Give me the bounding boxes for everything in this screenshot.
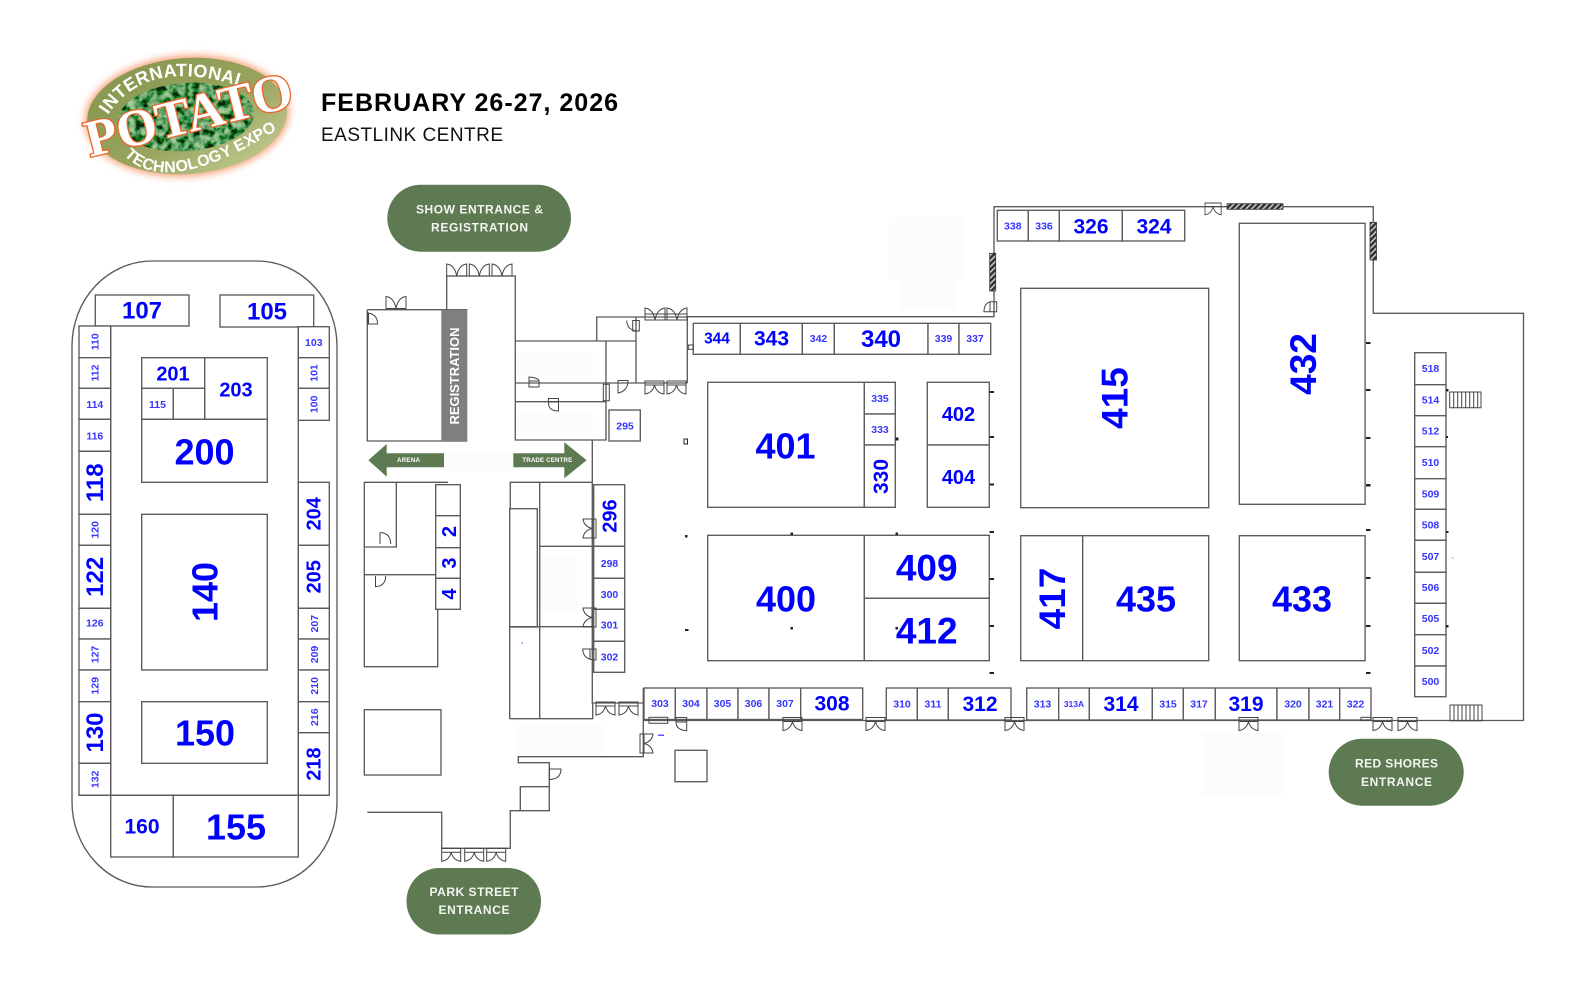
title: date: FEBRUARY 26-27, 2026 bbox=[321, 89, 618, 117]
booth 122: 122 bbox=[82, 557, 109, 597]
booth 409 bbox=[864, 535, 989, 598]
booth 314: 314 bbox=[1103, 693, 1139, 716]
booth 409: 409 bbox=[896, 548, 958, 588]
subtitle: venue: EASTLINK CENTRE bbox=[321, 125, 503, 146]
building walls bbox=[367, 207, 1523, 848]
booth 295 bbox=[609, 410, 640, 441]
booth 100: 100 bbox=[308, 395, 320, 413]
booth 304 bbox=[675, 688, 707, 720]
panel: arena booths bbox=[79, 295, 329, 857]
booth 304: 304 bbox=[682, 698, 700, 710]
booth 300: 300 bbox=[601, 589, 618, 601]
logo: International Potato Technology Expo: INTERNATIONAL bbox=[98, 64, 241, 114]
single doors bbox=[368, 302, 997, 780]
booth 301: 301 bbox=[601, 620, 618, 632]
booth 302: 302 bbox=[601, 652, 618, 664]
booth 330: 330 bbox=[870, 459, 893, 494]
booth 112: 112 bbox=[90, 364, 102, 381]
booth 512: 512 bbox=[1422, 426, 1439, 438]
booth 140 bbox=[142, 514, 267, 670]
booth 129: 129 bbox=[90, 677, 102, 695]
door frames and small fixtures bbox=[649, 345, 1371, 723]
pill: park street entrance: ENTRANCE bbox=[438, 903, 510, 917]
booth 115 bbox=[142, 388, 173, 419]
arena hall outline bbox=[72, 261, 337, 887]
registration room bar: REGISTRATION bbox=[447, 328, 462, 424]
booth 432 bbox=[1239, 223, 1365, 504]
left rooms bbox=[364, 482, 448, 667]
panel: trade centre booths bbox=[436, 410, 640, 672]
booth 118: 118 bbox=[82, 463, 109, 502]
booth 320: 320 bbox=[1284, 698, 1302, 710]
booth 210: 210 bbox=[309, 677, 321, 695]
booth 307 bbox=[769, 688, 801, 720]
booth 201 bbox=[142, 358, 205, 388]
booth 201: 201 bbox=[156, 364, 190, 386]
booth 339: 339 bbox=[935, 333, 952, 345]
booth 116 bbox=[79, 419, 111, 451]
booth 103: 103 bbox=[305, 337, 323, 349]
booth 298: 298 bbox=[601, 558, 618, 570]
booth 209: 209 bbox=[309, 646, 321, 663]
booth 306 bbox=[738, 688, 769, 720]
booth 308 bbox=[801, 688, 863, 720]
booth 303 bbox=[644, 688, 675, 720]
booth 306: 306 bbox=[745, 698, 762, 710]
booth 400 bbox=[708, 535, 864, 661]
booth 317 bbox=[1183, 688, 1215, 720]
booth 313 bbox=[1027, 688, 1059, 720]
stairs upper bbox=[1450, 392, 1481, 408]
pill: red shores entrance: ENTRANCE bbox=[1361, 775, 1432, 789]
booth 313A bbox=[1059, 688, 1089, 720]
booth 296 bbox=[594, 485, 625, 546]
booth 4 bbox=[436, 578, 461, 609]
booth 126: 126 bbox=[86, 618, 104, 630]
arrow: trade centre bbox=[513, 442, 587, 478]
hatched window right bbox=[1370, 222, 1376, 260]
booth 218 bbox=[298, 733, 329, 795]
hatched window left bbox=[990, 253, 996, 291]
booth 435: 435 bbox=[1116, 578, 1176, 620]
double doors bbox=[386, 203, 1417, 861]
booth 127: 127 bbox=[90, 646, 102, 663]
booth 502: 502 bbox=[1422, 645, 1439, 657]
booth 160 bbox=[111, 795, 173, 857]
booth 216: 216 bbox=[309, 708, 321, 726]
booth 126 bbox=[79, 608, 111, 639]
trade centre rooms bbox=[510, 482, 593, 719]
booth 404: 404 bbox=[942, 467, 976, 489]
booth 209 bbox=[298, 639, 329, 670]
booth 155: 155 bbox=[206, 806, 266, 848]
arrow: arena bbox=[368, 444, 444, 477]
booth 344: 344 bbox=[704, 330, 730, 348]
booth 506 bbox=[1415, 572, 1446, 603]
booth 112 bbox=[79, 358, 111, 388]
storage room square bbox=[364, 710, 441, 775]
booth 130: 130 bbox=[82, 712, 109, 753]
booth 308: 308 bbox=[814, 692, 850, 716]
booth 326: 326 bbox=[1073, 216, 1109, 238]
booth 313A: 313A bbox=[1064, 699, 1084, 709]
booth 307: 307 bbox=[776, 698, 794, 710]
booth 105 bbox=[220, 295, 314, 327]
booth 150 bbox=[142, 702, 267, 763]
booth 310 bbox=[886, 688, 917, 720]
booth 333: 333 bbox=[871, 424, 889, 436]
column markers bbox=[684, 342, 1448, 674]
booth 103 bbox=[298, 327, 329, 358]
booth 130 bbox=[79, 702, 111, 763]
booth 129 bbox=[79, 670, 111, 702]
booth 402: 402 bbox=[942, 404, 975, 426]
logo: International Potato Technology Expo: POTATO bbox=[79, 62, 299, 169]
booth 506: 506 bbox=[1422, 582, 1439, 594]
booth 110 bbox=[79, 326, 111, 358]
booth 337 bbox=[959, 323, 991, 354]
booth 510 bbox=[1415, 447, 1446, 479]
booth 314 bbox=[1089, 688, 1152, 720]
booth 435 bbox=[1083, 536, 1209, 661]
booth 417: 417 bbox=[1032, 568, 1073, 629]
booth 433: 433 bbox=[1272, 578, 1332, 620]
arrow: arena: ARENA bbox=[397, 457, 421, 464]
booth 207: 207 bbox=[309, 615, 321, 632]
booth 114: 114 bbox=[86, 399, 103, 411]
booth 312 bbox=[948, 688, 1011, 720]
panel: east row booths 518-500 bbox=[1415, 353, 1446, 697]
booth 305: 305 bbox=[714, 698, 731, 710]
booth 302 bbox=[594, 641, 625, 672]
booth 507 bbox=[1415, 540, 1446, 572]
booth 335 bbox=[864, 382, 895, 414]
booth 203 bbox=[205, 358, 267, 419]
booth 401: 401 bbox=[755, 426, 816, 466]
booth 400: 400 bbox=[756, 578, 816, 620]
panel: top row booths 338-324 bbox=[997, 210, 1185, 241]
booth 160: 160 bbox=[124, 816, 160, 838]
pill: red shores entrance bbox=[1329, 739, 1464, 806]
booth 110: 110 bbox=[90, 333, 102, 350]
booth 140: 140 bbox=[185, 562, 226, 622]
booth 200: 200 bbox=[174, 432, 235, 472]
booth 2 bbox=[436, 516, 461, 548]
booth 508 bbox=[1415, 509, 1446, 540]
booth 415: 415 bbox=[1094, 367, 1136, 429]
booth 305 bbox=[707, 688, 738, 720]
tiny stray marks bbox=[522, 558, 1454, 736]
booth 401 bbox=[708, 382, 864, 507]
booth 298 bbox=[594, 546, 625, 578]
booth 315: 315 bbox=[1159, 698, 1177, 710]
booth 296: 296 bbox=[599, 499, 621, 533]
booth 310: 310 bbox=[893, 698, 911, 710]
booth 107: 107 bbox=[122, 298, 162, 324]
booth 295: 295 bbox=[616, 420, 634, 432]
booth 321 bbox=[1309, 688, 1340, 720]
booth 218: 218 bbox=[304, 747, 326, 781]
booth 342: 342 bbox=[810, 333, 827, 345]
pill: park street entrance bbox=[406, 868, 541, 934]
booth 433 bbox=[1239, 536, 1365, 661]
booth 342 bbox=[802, 323, 834, 354]
booth 514: 514 bbox=[1422, 394, 1439, 406]
booth 338: 338 bbox=[1004, 220, 1022, 232]
booth 508: 508 bbox=[1422, 520, 1439, 532]
booth 200 bbox=[142, 419, 267, 482]
booth 101 bbox=[298, 358, 329, 388]
booth 107 bbox=[95, 295, 189, 326]
booth 210 bbox=[298, 670, 329, 702]
booth 412 bbox=[864, 598, 989, 661]
booth 311 bbox=[917, 688, 948, 720]
booth 207 bbox=[298, 608, 329, 639]
booth 333 bbox=[864, 414, 895, 445]
stairs lower bbox=[1450, 705, 1482, 721]
pill: show entrance and registration bbox=[387, 185, 571, 252]
booth 3 bbox=[436, 548, 461, 578]
booth 324 bbox=[1122, 210, 1185, 241]
booth 127 bbox=[79, 639, 111, 670]
booth 510: 510 bbox=[1422, 457, 1439, 469]
booth 303: 303 bbox=[651, 698, 669, 710]
booth 340 bbox=[834, 323, 928, 354]
booth 512 bbox=[1415, 416, 1446, 447]
booth 320 bbox=[1277, 688, 1309, 720]
booth 204 bbox=[298, 482, 329, 545]
arena interior walls bbox=[79, 326, 329, 795]
booth 122 bbox=[79, 545, 111, 608]
booth 402 bbox=[927, 382, 989, 445]
booth 336: 336 bbox=[1035, 220, 1053, 232]
booth 509: 509 bbox=[1422, 488, 1439, 500]
booth 321: 321 bbox=[1316, 698, 1333, 710]
booth 412: 412 bbox=[896, 610, 958, 652]
booth 118 bbox=[79, 451, 111, 514]
booth 315 bbox=[1152, 688, 1183, 720]
panel: south row booths 303-322 bbox=[644, 688, 1371, 720]
panel: north row booths 344-337 bbox=[693, 323, 991, 354]
booth 115: 115 bbox=[149, 399, 166, 411]
booth 120 bbox=[79, 514, 111, 545]
booth 336 bbox=[1028, 210, 1059, 241]
booth 100 bbox=[298, 388, 329, 420]
booth 326 bbox=[1059, 210, 1122, 241]
booth 313: 313 bbox=[1034, 698, 1051, 710]
booth 505 bbox=[1415, 603, 1446, 635]
booth 337: 337 bbox=[966, 333, 984, 345]
booth 432: 432 bbox=[1283, 333, 1324, 395]
registration room bar bbox=[441, 310, 467, 441]
booth 344 bbox=[693, 323, 740, 354]
booth 502 bbox=[1415, 635, 1446, 666]
booth 4: 4 bbox=[439, 588, 461, 600]
unnumbered booth above 2 bbox=[436, 485, 460, 516]
booth 338 bbox=[997, 210, 1028, 241]
booth 509 bbox=[1415, 479, 1446, 509]
booth 312: 312 bbox=[962, 693, 998, 716]
booth 205 bbox=[298, 545, 329, 608]
booth 340: 340 bbox=[861, 326, 901, 353]
booth 2: 2 bbox=[439, 526, 461, 537]
booth 101: 101 bbox=[308, 364, 320, 382]
booth 330 bbox=[864, 445, 895, 507]
booth 335: 335 bbox=[871, 393, 889, 405]
booth 317: 317 bbox=[1190, 698, 1208, 710]
booth 216 bbox=[298, 702, 329, 733]
booth 114 bbox=[79, 388, 111, 419]
booth 205: 205 bbox=[304, 560, 326, 593]
booth 505: 505 bbox=[1422, 613, 1439, 625]
booth 300 bbox=[594, 578, 625, 609]
booth 500: 500 bbox=[1422, 676, 1439, 688]
logo: International Potato Technology Expo: TECHNOLOGY EXPO bbox=[126, 122, 274, 172]
booth 322: 322 bbox=[1347, 698, 1364, 710]
booth 203: 203 bbox=[219, 380, 253, 402]
panel: main floor booths bbox=[708, 223, 1365, 661]
booth 500 bbox=[1415, 666, 1446, 697]
booth 120: 120 bbox=[90, 521, 102, 539]
faint background patches bbox=[446, 217, 1282, 796]
hatched window top bbox=[1227, 204, 1283, 209]
booth 518 bbox=[1415, 353, 1446, 385]
booth 343 bbox=[740, 323, 802, 354]
booth 105: 105 bbox=[247, 298, 287, 326]
booth 150: 150 bbox=[175, 712, 235, 754]
booth 319 bbox=[1215, 688, 1277, 720]
booth 518: 518 bbox=[1422, 363, 1439, 375]
small square room bbox=[675, 750, 707, 782]
booth 507: 507 bbox=[1422, 551, 1439, 563]
booth 417 bbox=[1021, 536, 1083, 661]
booth 155 bbox=[173, 795, 298, 857]
pill: show entrance and registration: REGISTRATION bbox=[431, 220, 528, 234]
booth 132 bbox=[79, 763, 111, 795]
pill: show entrance and registration: SHOW ENTRANCE & bbox=[416, 202, 543, 216]
booth 319: 319 bbox=[1228, 693, 1264, 716]
booth 343: 343 bbox=[754, 328, 789, 350]
booth 132: 132 bbox=[90, 770, 102, 788]
arrow: trade centre: TRADE CENTRE bbox=[522, 457, 572, 464]
booth 3: 3 bbox=[439, 557, 461, 569]
pill: red shores entrance: RED SHORES bbox=[1355, 756, 1438, 770]
booth 116: 116 bbox=[86, 430, 103, 442]
booth 404 bbox=[927, 445, 989, 507]
empty booth beside 115 bbox=[173, 388, 205, 419]
pill: park street entrance: PARK STREET bbox=[430, 885, 519, 899]
booth 415 bbox=[1021, 288, 1209, 508]
booth 339 bbox=[928, 323, 959, 354]
booth 324: 324 bbox=[1136, 216, 1172, 238]
booth 204: 204 bbox=[304, 496, 326, 530]
booth 514 bbox=[1415, 385, 1446, 416]
booth 311: 311 bbox=[925, 698, 942, 710]
booth 301 bbox=[594, 609, 625, 641]
booth 322 bbox=[1340, 688, 1371, 720]
